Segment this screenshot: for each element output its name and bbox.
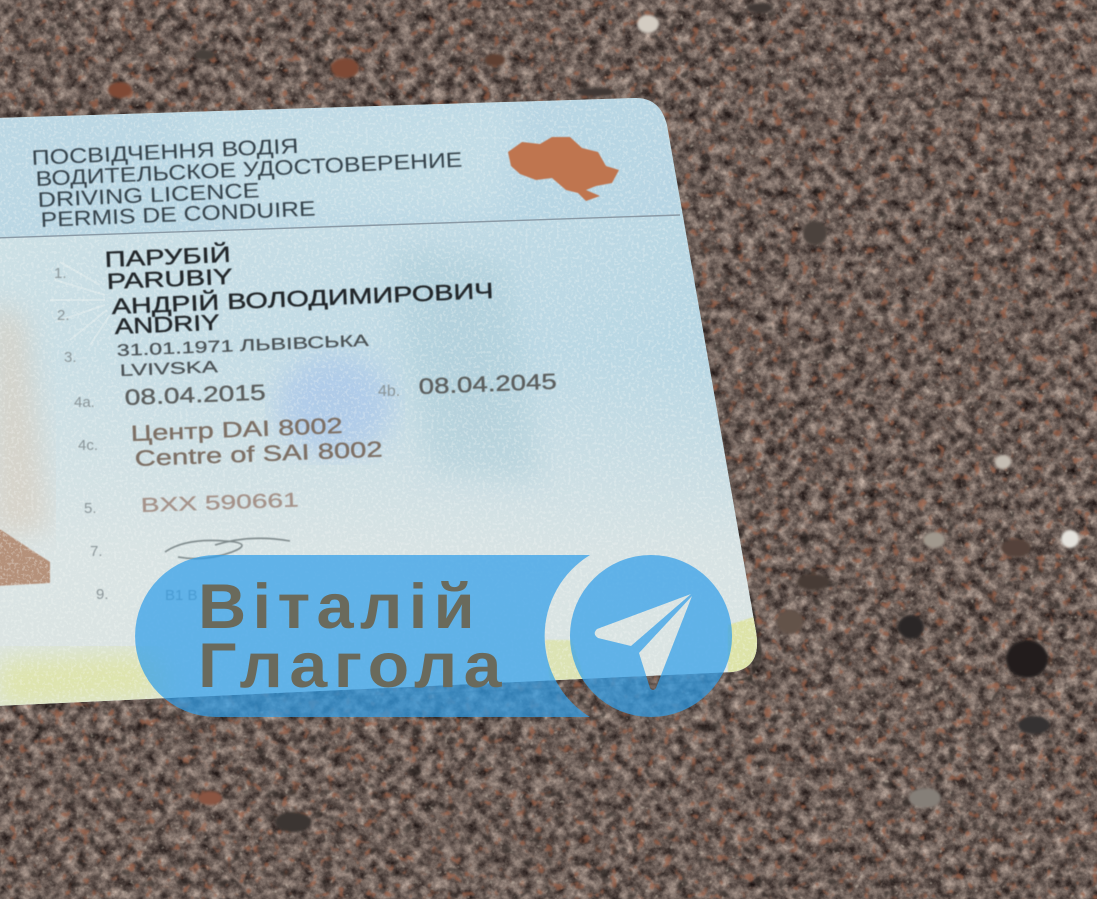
- birth date and place: LVIVSKA: [119, 358, 218, 380]
- icon: telegram circle with paper plane cut-out: [570, 555, 732, 717]
- name lines: ПАРУБІЙ: [104, 242, 231, 272]
- holographic blue seal: [277, 355, 393, 455]
- heading text: licence titles: DRIVING LICENCE: [37, 179, 260, 212]
- birth date and place: [116, 332, 369, 380]
- field numbers: 9.: [96, 586, 109, 603]
- name lines: PARUBIY: [106, 264, 234, 294]
- field numbers: 3.: [64, 349, 77, 366]
- issuing authority: Центр DAI 8002: [130, 413, 343, 446]
- watermark name: Віталій: [198, 572, 481, 642]
- issue and expiry dates: 08.04.2045: [418, 369, 557, 399]
- field numbers: 4a.: [74, 394, 95, 411]
- yellow-green band at the bottom: [0, 652, 170, 708]
- field numbers: 1.: [54, 265, 67, 282]
- driving licence card: [0, 95, 775, 715]
- heading text: licence titles: ВОДИТЕЛЬСКОЕ УДОСТОВЕРЕНИЕ: [35, 149, 463, 191]
- watermark name: Глагола: [198, 631, 508, 701]
- licence number: BXX 590661: [140, 489, 299, 517]
- field numbers: 4c.: [78, 437, 98, 454]
- blue pill with transparent ring cut-out: [135, 555, 590, 717]
- icon: map of Ukraine: [508, 137, 619, 201]
- header tint: [0, 98, 680, 238]
- personal data fields: [54, 242, 557, 604]
- field numbers: 7.: [90, 543, 103, 560]
- name lines: [104, 242, 494, 339]
- name lines: ANDRIY: [114, 310, 221, 339]
- sun rays around field numbers: [50, 262, 110, 345]
- trident emblem watermark: [402, 258, 536, 479]
- field numbers: 5.: [84, 500, 97, 517]
- watermark name: [198, 572, 508, 701]
- pale lower half of the card: [0, 392, 757, 706]
- heading text: licence titles: ПОСВІДЧЕННЯ ВОДІЯ: [31, 135, 299, 170]
- heading text: licence titles: PERMIS DE CONDUIRE: [40, 197, 316, 232]
- issue and expiry dates: [124, 369, 557, 410]
- heading text: licence titles: [31, 135, 463, 232]
- issuing authority: Centre of SAI 8002: [134, 436, 383, 471]
- field numbers: 4b.: [378, 383, 400, 400]
- signature: [165, 538, 290, 559]
- photo area: [0, 300, 50, 540]
- name lines: АНДРІЙ ВОЛОДИМИРОВИЧ: [111, 278, 494, 319]
- field numbers: B1 B: [165, 587, 198, 604]
- birth date and place: 31.01.1971 ЛЬВІВСЬКА: [116, 332, 369, 360]
- field numbers: [54, 265, 400, 604]
- field numbers: 2.: [57, 307, 70, 324]
- issue and expiry dates: 08.04.2015: [124, 380, 266, 410]
- card shadow: [0, 600, 762, 712]
- issuing authority: [130, 413, 383, 471]
- header divider: [0, 215, 680, 238]
- watermark: Telegram channel badge: [135, 555, 732, 717]
